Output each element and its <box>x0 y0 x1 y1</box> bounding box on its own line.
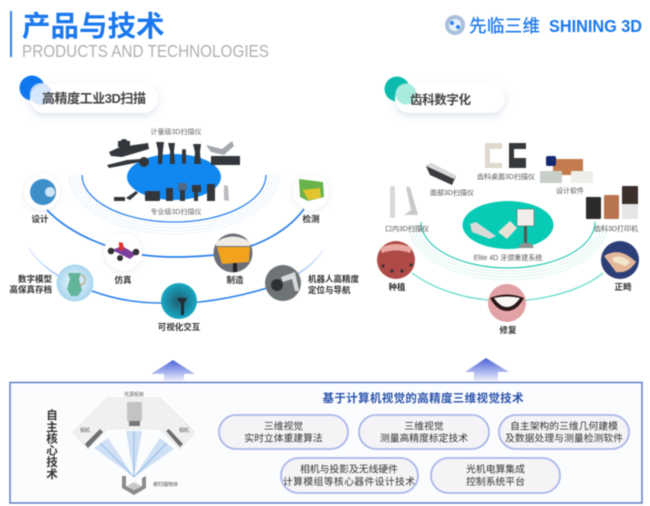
logo: SHINING 3D <box>445 15 642 36</box>
label: Elite 4D: Elite 4D 牙颌重建系统 <box>474 253 542 262</box>
tech pill 2: 三维视觉 <box>404 420 444 432</box>
vertical heading: 主 <box>46 420 58 434</box>
metrology scanner products <box>107 139 240 168</box>
teal product ellipse <box>462 201 554 249</box>
app: inspection <box>293 174 329 224</box>
tech pill 5: 控制系统平台 <box>466 475 525 488</box>
app: manufacturing <box>214 234 252 285</box>
product: design software: 设计软件 <box>556 186 584 195</box>
tech pill 3: 及数据处理与测量检测软件 <box>505 432 623 444</box>
blue product ellipse <box>127 154 221 200</box>
label: metrology scanners: 计量级3D扫描仪 <box>151 127 201 136</box>
tech pill 1: 实时立体重建算法 <box>244 432 323 444</box>
tech pill 3 <box>499 415 629 449</box>
tech pill 3: 自主架构的三维几何建模 <box>510 420 618 432</box>
diagram: dental product rings <box>385 143 638 280</box>
title: 产品与技术 <box>22 11 165 43</box>
app: visual interaction: 可视化交互 <box>158 322 201 332</box>
app: inspection: 检测 <box>302 214 320 224</box>
vertical heading: 自 <box>46 408 58 422</box>
tech pill 4: 计算模组等核心器件设计技术 <box>283 475 415 488</box>
product: intraoral scanners <box>385 186 429 233</box>
app: restoration <box>488 284 526 335</box>
heading: dental digitalization: 齿科数字化 <box>410 92 471 107</box>
app: digital archive: 数字模型 <box>18 274 52 284</box>
product: design software <box>540 156 593 195</box>
logo: SHINING 3D: SHINING 3D <box>549 16 642 36</box>
app: robot positioning: 机器人高精度 <box>308 274 360 284</box>
product: face scanner: 面部3D扫描仪 <box>430 188 474 197</box>
subtitle: PRODUCTS AND TECHNOLOGIES <box>22 41 269 61</box>
diagram: structured light scanner: 被扫描物体 <box>153 481 178 488</box>
app: simulation <box>104 233 142 285</box>
app: digital archive <box>9 264 94 302</box>
diagram: structured light scanner: 相机 <box>179 427 189 434</box>
heading: dental digitalization <box>384 76 505 113</box>
vertical heading <box>46 408 58 481</box>
app: manufacturing: 制造 <box>226 275 244 285</box>
diagram: industrial application arcs <box>28 209 323 303</box>
logo: SHINING 3D: 先临三维 <box>469 16 540 36</box>
app: orthodontics: 正畸 <box>614 282 632 292</box>
app: simulation: 仿真 <box>114 275 132 285</box>
app: orthodontics <box>601 241 639 292</box>
diagram: industrial product rings <box>69 127 279 234</box>
tech pill 4 <box>281 458 418 493</box>
tech pill 4: 相机与投影及无线硬件 <box>300 462 398 476</box>
app: design: 设计 <box>31 214 49 224</box>
diagram: structured light scanner: 相机 <box>80 427 90 434</box>
professional scanner products <box>114 183 229 201</box>
tech pill 2: 测量高精度标定技术 <box>380 432 468 444</box>
arrow: right up <box>465 358 509 381</box>
app: digital archive: 高保真存档 <box>9 284 52 294</box>
app: implant <box>377 241 415 292</box>
header: title block <box>10 11 269 61</box>
tech pill 1 <box>219 415 348 449</box>
heading: industrial 3D scanning <box>20 76 158 113</box>
label: professional scanners: 专业级3D扫描仪 <box>151 207 201 216</box>
tech pill 5 <box>431 458 560 493</box>
vertical heading: 技 <box>46 455 58 469</box>
vertical heading: 核 <box>46 432 58 446</box>
diagram: structured light scanner: 光源投射 <box>124 391 144 398</box>
vertical heading: 术 <box>46 467 58 481</box>
diagram: dental application arc <box>412 273 603 302</box>
product: dental desktop scanners <box>477 143 535 181</box>
app: robot positioning: 定位与导航 <box>308 285 351 295</box>
arrow: left up <box>151 360 195 381</box>
app: restoration: 修复 <box>499 325 517 335</box>
vertical heading: 心 <box>46 444 58 457</box>
tech pill 2 <box>359 415 489 449</box>
heading: industrial 3D scanning: 高精度工业3D扫描 <box>42 91 146 106</box>
diagram: structured light scanner <box>73 391 195 495</box>
app: implant: 种植 <box>388 282 406 292</box>
tech pill 1: 三维视觉 <box>264 420 303 432</box>
product: dental 3D printers <box>586 186 638 233</box>
product: face scanner <box>426 163 474 197</box>
product: dental 3D printers: 齿科3D打印机 <box>594 224 638 233</box>
app: visual interaction <box>158 283 201 332</box>
Elite 4D system products <box>470 209 534 248</box>
panel heading: 基于计算机视觉的高精度三维视觉技术 <box>322 391 524 405</box>
product: intraoral scanners: 口内3D扫描仪 <box>385 224 429 233</box>
app: design <box>24 174 60 224</box>
panel: core technology <box>10 382 642 503</box>
product: dental desktop scanners: 齿科桌面3D扫描仪 <box>477 172 535 181</box>
app: robot positioning <box>265 265 360 301</box>
tech pill 5: 光机电算集成 <box>466 462 525 476</box>
